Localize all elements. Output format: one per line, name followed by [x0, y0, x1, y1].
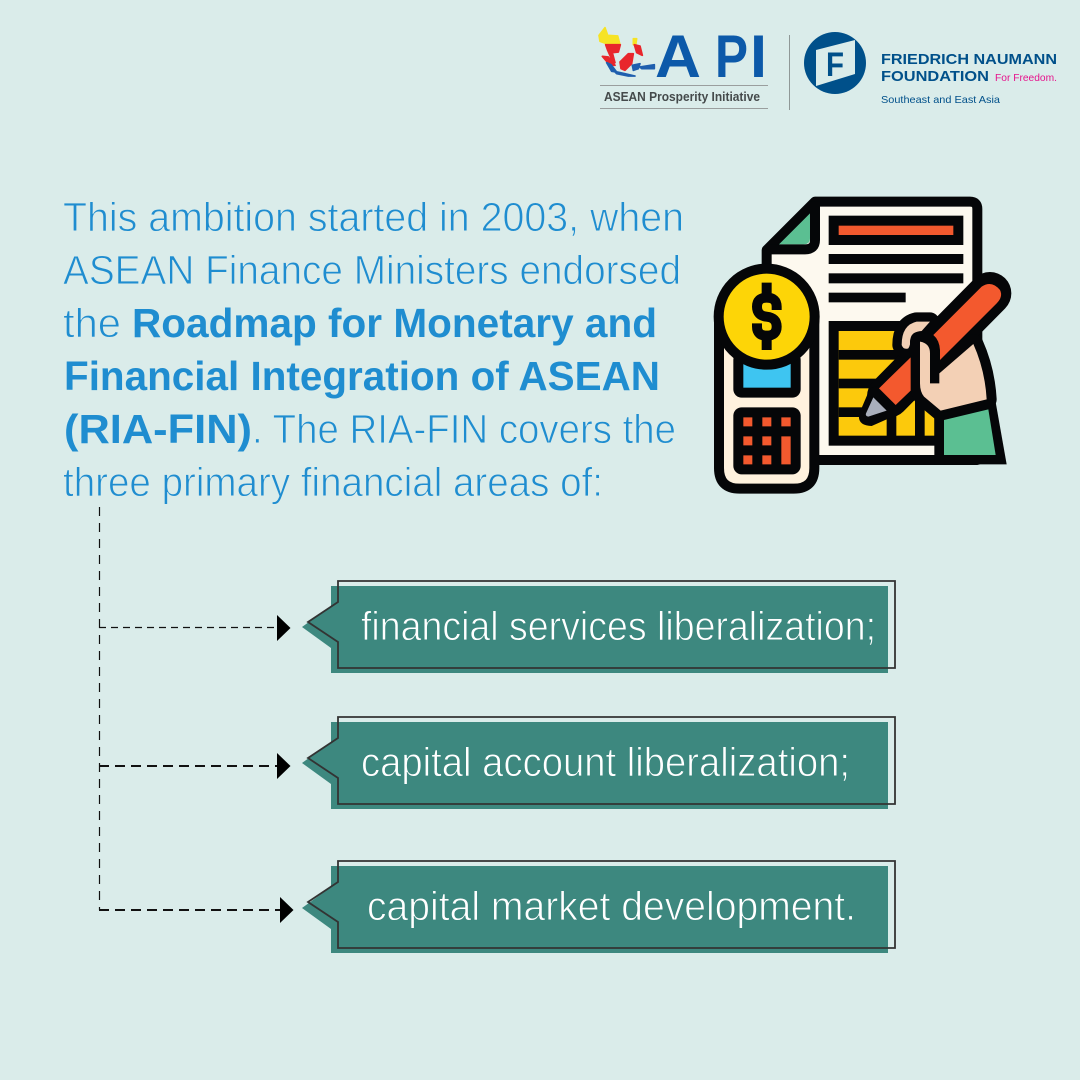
logo: Friedrich Naumann Foundation	[804, 32, 1057, 106]
icon: ASEAN map	[599, 28, 654, 76]
dashed connector trunk	[98, 507, 100, 910]
logo tagline: ASEAN Prosperity Initiative	[604, 90, 760, 104]
logo name line 1: FRIEDRICH NAUMANN	[881, 51, 1057, 68]
intro paragraph	[63, 194, 684, 505]
icon: FNF circle: F	[826, 46, 844, 84]
callout: capital account liberalization: capital account liberalization;	[361, 739, 850, 785]
intro paragraph: the	[63, 300, 121, 346]
callout: capital market development: capital market development.	[367, 883, 856, 929]
intro paragraph: three primary financial areas of:	[63, 459, 603, 505]
logo wordmark: API: A	[655, 23, 701, 90]
logo slogan: For Freedom.	[995, 72, 1057, 84]
intro paragraph: This ambition started in 2003, when	[63, 194, 684, 240]
callout: financial services liberalization: financial services liberalization;	[361, 603, 876, 649]
arrow: to capital account	[99, 753, 290, 779]
pencil body	[879, 284, 1001, 405]
intro paragraph: Roadmap for Monetary and	[132, 300, 657, 346]
logo wordmark: API	[655, 23, 767, 90]
callout: financial services liberalization	[302, 581, 895, 673]
intro paragraph: ASEAN Finance Ministers endorsed	[63, 247, 681, 293]
logo: ASEAN Prosperity Initiative	[599, 23, 768, 108]
arrow: to financial services	[99, 615, 290, 641]
arrow: to capital market	[99, 897, 294, 923]
icon: FNF circle	[804, 32, 866, 94]
intro paragraph: Financial Integration of ASEAN	[64, 353, 660, 399]
pencil outline	[859, 293, 990, 426]
intro paragraph: (RIA-FIN)	[64, 406, 252, 452]
hand	[902, 322, 1007, 464]
logo name line 2: FOUNDATION	[881, 68, 989, 85]
logo region: Southeast and East Asia	[881, 94, 1000, 106]
callout: capital account liberalization	[302, 717, 895, 809]
document	[767, 202, 977, 460]
callout: capital market development	[302, 861, 895, 953]
logo wordmark: API: I	[750, 23, 767, 90]
calculator and coin	[719, 269, 815, 489]
icon: financial document, calculator and hand with pencil	[719, 202, 1007, 489]
intro paragraph: . The RIA-FIN covers the	[252, 406, 676, 452]
logo wordmark: API: P	[715, 23, 748, 90]
